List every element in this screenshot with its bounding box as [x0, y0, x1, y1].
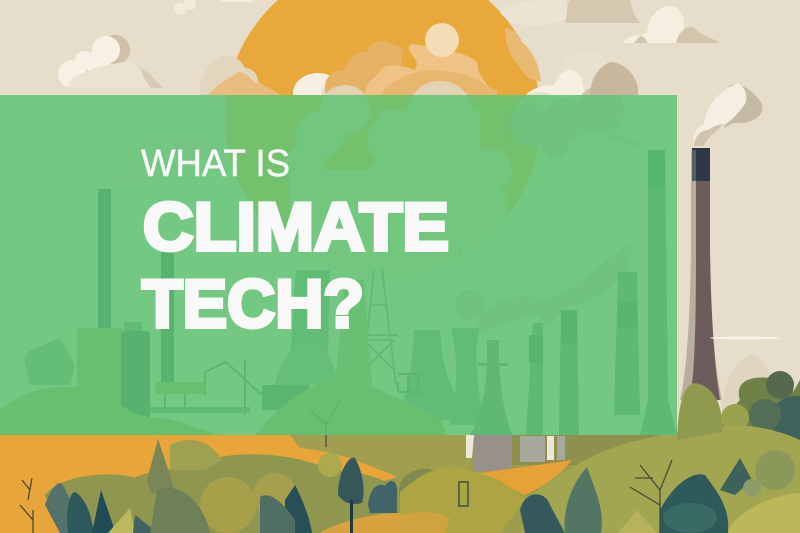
smoke plume: left wisp: [103, 130, 217, 188]
bottom land: olive base: [0, 435, 800, 533]
chimney: second: [161, 252, 174, 382]
bare trees: [20, 400, 672, 533]
smoke plume: central mass: [285, 81, 628, 320]
tree cluster: right: [721, 371, 800, 533]
chimneys: right group: [526, 150, 677, 435]
heading line: climate: CLIMATE: [143, 189, 449, 265]
building: left block: [77, 322, 150, 441]
heading line: what is: WHAT IS: [141, 143, 290, 185]
heading: [141, 143, 449, 342]
cloud: left: [58, 35, 163, 88]
power station base: [466, 435, 565, 472]
bushes: left: [24, 338, 75, 385]
cloud: top right cream: [623, 6, 720, 43]
machinery: crane and conveyor: [150, 360, 310, 415]
cloud: small top: [174, 0, 253, 15]
smoke under the panel: [103, 81, 650, 335]
cloud: centre cream: [293, 73, 349, 95]
cloud: on sun: [325, 23, 541, 95]
factory silhouettes: [24, 150, 677, 441]
bottom land: orange hills: [0, 435, 400, 533]
sun: [225, 0, 541, 276]
heading line: tech: TECH?: [142, 266, 364, 342]
smoke plume: right darker mass: [455, 86, 650, 335]
dark trees: foreground right: [520, 450, 795, 533]
olive bush by chimney: [677, 383, 722, 440]
orange patch: [465, 460, 572, 495]
chimney: far left: [98, 189, 111, 329]
right band behind plant: [510, 435, 680, 465]
smoke from big chimney: [694, 83, 763, 146]
band behind the hills: [290, 435, 470, 478]
green overlay panel: [0, 95, 677, 435]
cloud: right of sun: [526, 51, 638, 95]
dark trees: foreground left: [45, 439, 397, 533]
yellow hill: bottom right: [725, 493, 800, 533]
soft haze behind right trees: [722, 355, 770, 420]
big chimney: [680, 148, 722, 400]
foreground hills behind the panel: [0, 380, 450, 440]
cooling towers: centre: [275, 270, 512, 435]
tower: lattice pylon: [360, 270, 398, 385]
scaffold tower: [459, 482, 468, 506]
olive hill: right: [520, 426, 800, 533]
orange lower strip: [320, 513, 400, 533]
olive bushes: centre: [399, 467, 525, 533]
cloud streak: [710, 336, 780, 340]
platform: railing: [398, 374, 423, 392]
clouds in the sky: [58, 0, 720, 95]
cloud: top soft: [500, 0, 640, 26]
olive tree masses: left: [45, 440, 420, 533]
cloud: over sun left edge: [200, 56, 280, 95]
